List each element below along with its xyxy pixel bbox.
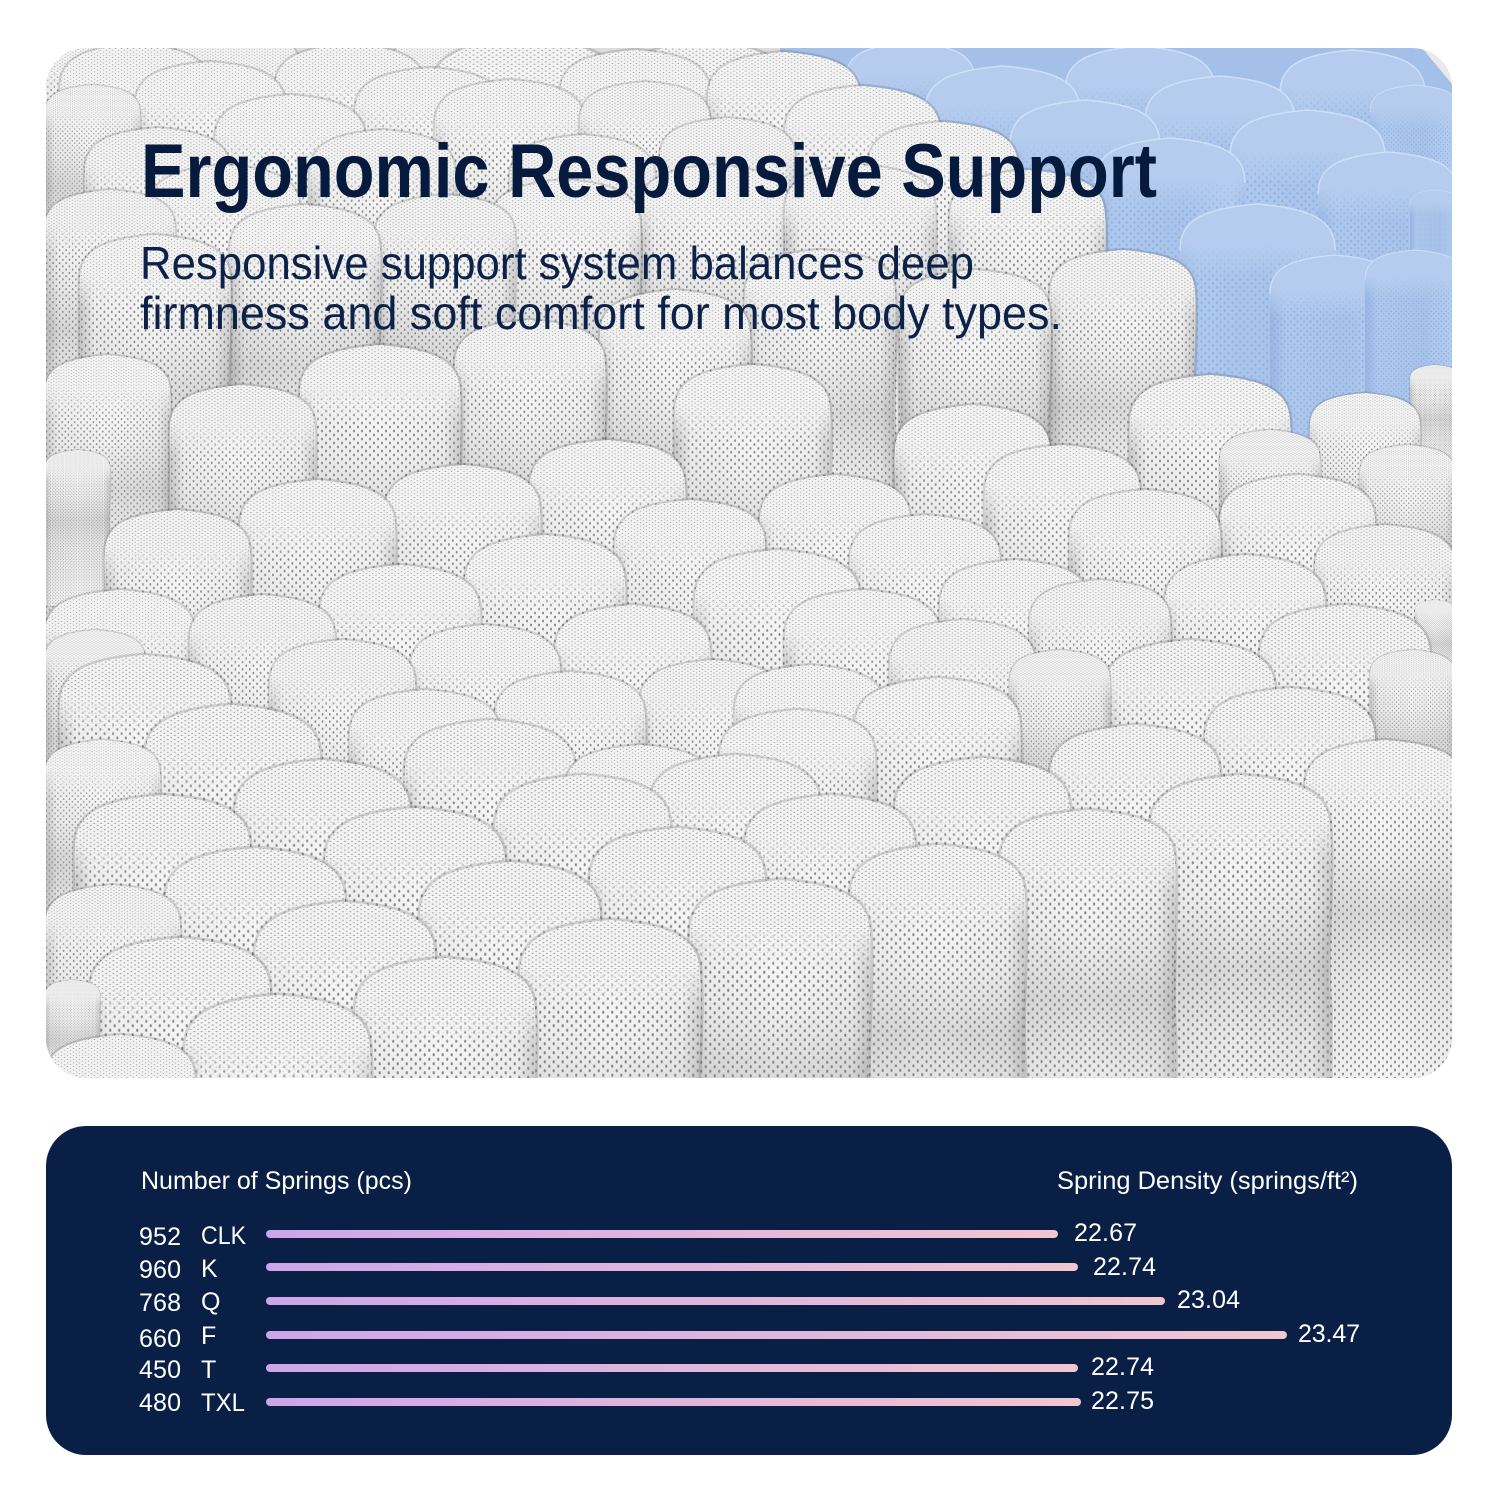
density values (1074, 1219, 1360, 1415)
mattress size labels (201, 1222, 246, 1417)
density values: 22.67 (1074, 1219, 1137, 1247)
title: Ergonomic Responsive Support (141, 129, 1157, 214)
mattress size labels: Q (201, 1288, 220, 1316)
subtitle text block (140, 237, 1062, 339)
spring counts: 660 (139, 1325, 181, 1353)
spring counts: 960 (139, 1256, 181, 1284)
subtitle text block: Responsive support system balances deep (140, 237, 974, 289)
mattress size labels: T (201, 1356, 216, 1384)
panel: mattress pocket springs photo (46, 48, 1452, 1078)
spring counts: 450 (139, 1356, 181, 1384)
blue foam-encased coils, upper right (780, 48, 1452, 440)
spring counts: 480 (139, 1389, 181, 1417)
spring counts: 768 (139, 1289, 181, 1317)
left column heading: Number of Springs (pcs) (141, 1167, 412, 1195)
density values: 22.75 (1091, 1387, 1154, 1415)
density values: 23.47 (1298, 1320, 1360, 1348)
mattress size labels: CLK (201, 1222, 246, 1250)
light corner behind the blue coils (1424, 50, 1452, 84)
subtitle text block: firmness and soft comfort for most body types. (140, 287, 1062, 339)
density values: 22.74 (1093, 1253, 1156, 1281)
spring counts (139, 1223, 181, 1417)
right column heading: Spring Density (springs/ft²) (1057, 1167, 1358, 1195)
density values: 23.04 (1177, 1286, 1240, 1314)
density values: 22.74 (1091, 1353, 1154, 1381)
density bars (266, 1230, 1287, 1406)
mattress size labels: TXL (201, 1389, 245, 1417)
panel: spring count and density chart (46, 1126, 1452, 1455)
mattress size labels: F (201, 1322, 216, 1350)
spring counts: 952 (139, 1223, 181, 1251)
mattress size labels: K (201, 1255, 218, 1283)
